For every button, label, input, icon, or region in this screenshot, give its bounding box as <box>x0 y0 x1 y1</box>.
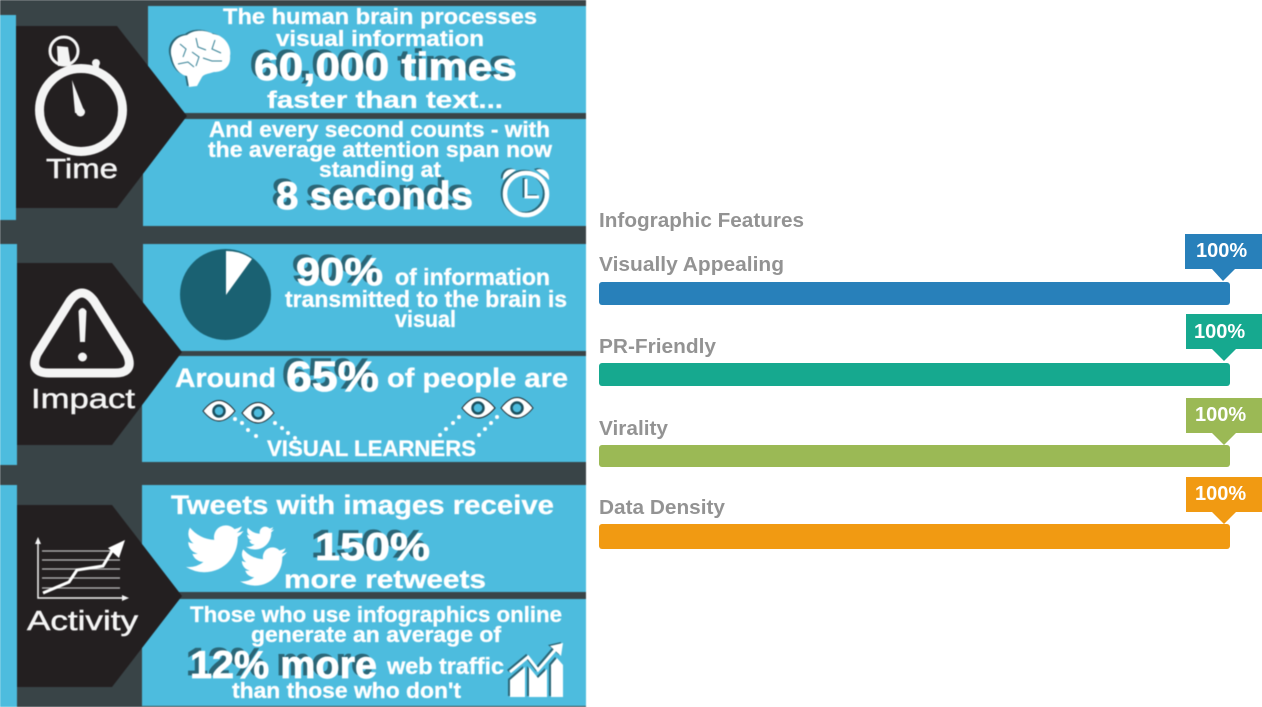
bar <box>599 363 1230 386</box>
panel: impact <box>0 244 586 465</box>
black arrow tag: impact <box>17 263 182 445</box>
text: attention span <box>208 117 553 218</box>
chart: infographic features <box>599 210 1262 549</box>
text: brain fact: faster than text... <box>267 87 503 114</box>
text: attention span: standing at <box>319 157 442 182</box>
label: Data Density <box>599 497 726 519</box>
icon: line chart <box>35 537 129 601</box>
text: brain fact: The human brain processes <box>223 4 537 29</box>
panel: activity <box>0 485 586 707</box>
panel: time <box>0 4 586 226</box>
text: retweets <box>171 490 554 594</box>
side bar: activity <box>0 485 17 707</box>
text: visual learners: Around <box>175 363 276 393</box>
label: PR-Friendly <box>599 336 717 358</box>
label: impact: Impact <box>31 383 135 414</box>
label: Virality <box>599 418 669 440</box>
label: activity: Activity <box>27 605 138 636</box>
icon: eyes left <box>203 400 274 423</box>
value callout: 100% <box>1196 240 1247 262</box>
panel: retweets <box>142 485 586 594</box>
side bar: impact <box>0 244 17 465</box>
text: attention span: the average attention span now <box>208 137 553 162</box>
text: brain fact <box>223 4 537 114</box>
value callout: 100% <box>1195 483 1246 505</box>
icon: warning triangle <box>35 293 129 373</box>
text: visual learners: of people are <box>387 363 568 393</box>
value callout <box>1186 314 1262 361</box>
value callout <box>1186 477 1262 524</box>
text: web traffic: than those who don't <box>232 678 462 703</box>
text: retweets: Tweets with images receive <box>171 490 554 520</box>
text: web traffic: generate an average of <box>251 622 502 647</box>
text: web traffic <box>190 602 562 703</box>
bar <box>599 445 1230 467</box>
text: ninety percent fact: 90% <box>296 251 383 294</box>
value callout <box>1186 398 1262 445</box>
value callout <box>1185 234 1262 281</box>
icon: brain <box>171 31 230 87</box>
text: retweets: 150% <box>315 526 430 569</box>
icon: stopwatch <box>40 37 122 152</box>
text: visual learners: VISUAL LEARNERS <box>267 436 476 461</box>
panel: attention span <box>143 117 586 226</box>
text: attention span: 8 seconds <box>276 175 473 218</box>
bar <box>599 282 1230 305</box>
text: retweets: more retweets <box>284 564 486 594</box>
black arrow tag: time <box>16 26 187 208</box>
text: visual learners <box>175 353 568 461</box>
text: ninety percent fact <box>285 251 567 332</box>
text: ninety percent fact: of information <box>395 264 550 290</box>
side bar: time <box>0 15 16 220</box>
row: data density <box>599 477 1262 549</box>
panel: web traffic <box>142 599 586 706</box>
text: brain fact: 60,000 times <box>254 46 517 89</box>
value callout: 100% <box>1194 321 1245 343</box>
text: brain fact: visual information <box>276 26 484 51</box>
text: web traffic: 12% more <box>190 644 377 687</box>
label: time: Time <box>46 153 118 184</box>
left infographic image <box>0 0 587 707</box>
chart heading: Infographic Features <box>599 210 804 232</box>
icon: alarm clock <box>503 169 549 215</box>
dark background <box>0 0 586 707</box>
icon: eyes right <box>462 398 533 418</box>
dotted sight lines <box>233 415 499 440</box>
text: ninety percent fact: visual <box>395 306 456 332</box>
icon: twitter birds <box>186 525 287 586</box>
row: virality <box>599 398 1262 467</box>
value callout: 100% <box>1195 404 1246 426</box>
text: visual learners: 65% <box>286 353 379 401</box>
text: attention span: And every second counts - with <box>209 117 550 142</box>
label: Visually Appealing <box>599 254 784 276</box>
text: web traffic: Those who use infographics online <box>190 602 562 627</box>
text: ninety percent fact: transmitted to the brain is <box>285 286 567 312</box>
panel: brain fact <box>148 4 586 114</box>
row: visually appealing <box>599 234 1262 305</box>
text: web traffic: web traffic <box>386 653 504 679</box>
black arrow tag: activity <box>17 505 182 687</box>
pie chart: 90 percent <box>180 249 271 340</box>
row: pr-friendly <box>599 314 1262 386</box>
panel: visual learners <box>142 353 586 462</box>
icon: rising bars <box>510 643 563 697</box>
bar <box>599 524 1230 549</box>
panel: ninety percent fact <box>143 244 586 351</box>
